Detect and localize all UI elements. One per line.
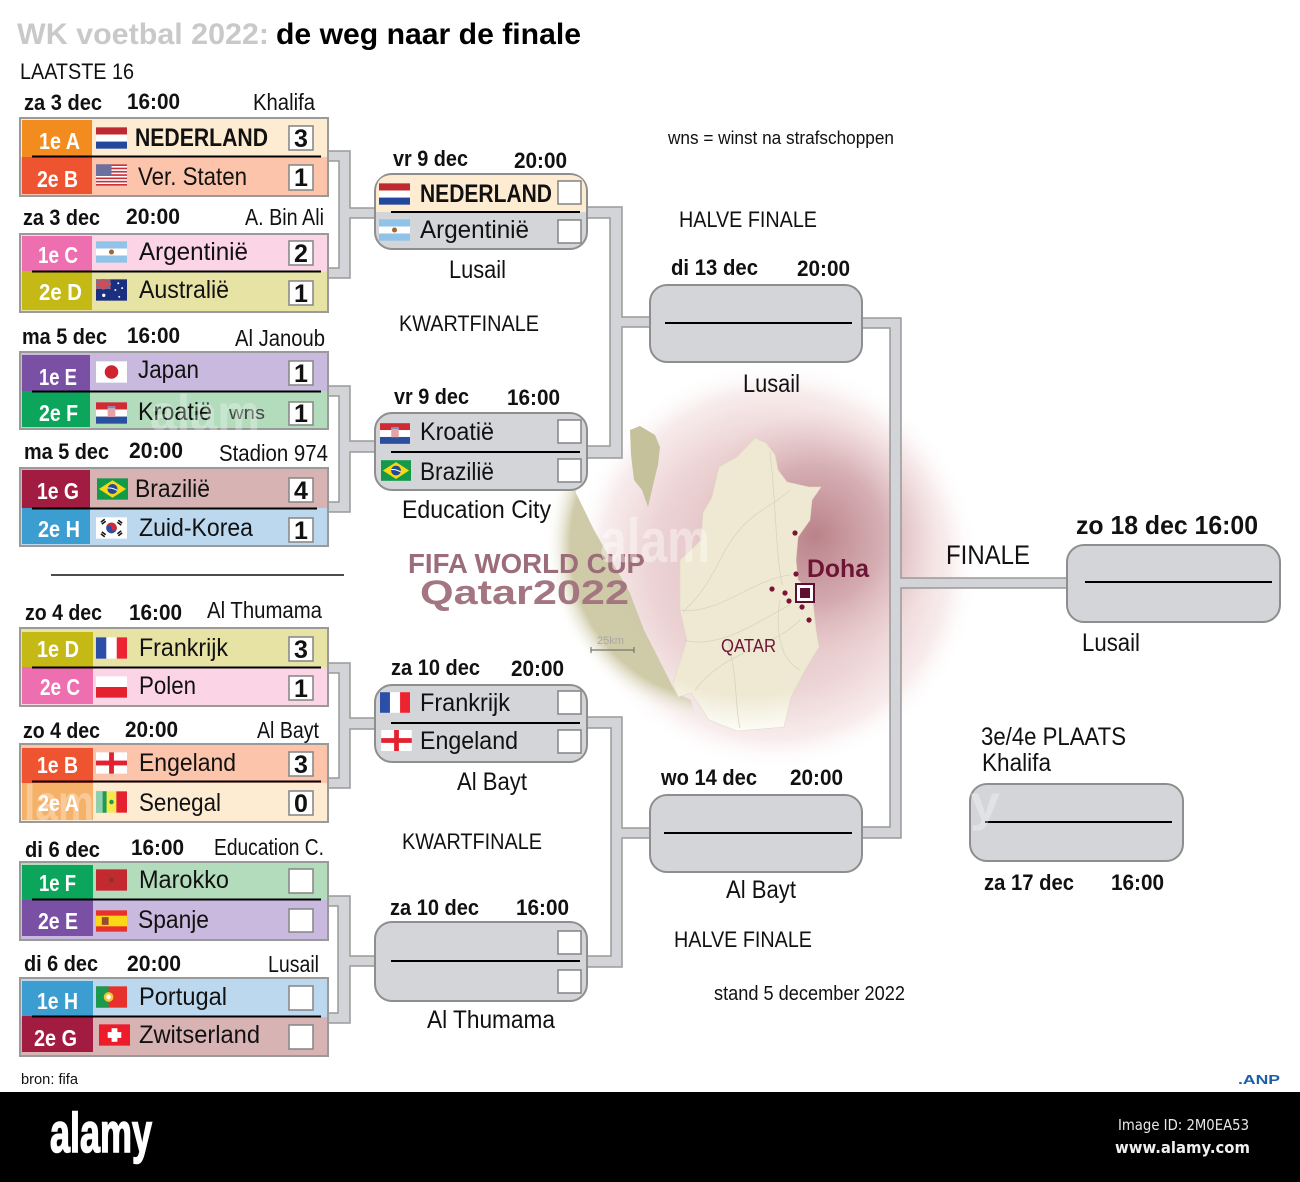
quarter-final: Kroatie - Brazilie: Kroatië [420,418,494,446]
match header: 20:00 [790,765,843,790]
footer site: www.alamy.com [1115,1138,1250,1157]
match: Nederland - Ver. Staten: 1 [294,164,308,192]
match date [984,870,1164,895]
match date: 16:00 [1111,870,1164,895]
match header [660,765,843,790]
heading: third place [981,723,1126,777]
heading: third place: Khalifa [982,749,1051,777]
match header: A. Bin Ali [245,204,324,230]
match: Argentinie - Australie [20,204,328,312]
match header: Lusail [268,951,319,977]
heading: semi final bottom: HALVE FINALE [674,927,812,952]
match header: zo 18 dec 16:00 [1076,510,1258,540]
match: Marokko - Spanje: Spanje [138,906,209,934]
match header: 16:00 [507,385,560,410]
map: mainland coast [545,400,705,745]
match: Japan - Kroatie: 1e E [39,364,77,390]
heading: quarter final bottom: KWARTFINALE [402,829,542,854]
match header: 20:00 [511,656,564,681]
match header [394,384,560,410]
match: Engeland - Senegal: Engeland [139,749,236,777]
match header: za 10 dec [391,655,480,680]
logo: FIFA World Cup Qatar 2022 [408,548,645,612]
match: Engeland - Senegal [20,717,328,822]
footer image id: Image ID: 2M0EA53 [1118,1116,1249,1134]
title: WK voetbal 2022: [17,18,269,51]
heading: quarter final top: KWARTFINALE [399,311,539,336]
match: Brazilie - Zuid-Korea [20,438,328,546]
match header [24,438,328,466]
venue: Al Bayt [457,768,527,796]
match header: ma 5 dec [24,439,109,464]
third place match [970,723,1183,895]
label: Doha: Doha [807,555,870,583]
match header: Stadion 974 [219,440,328,466]
match: Brazilie - Zuid-Korea: 4 [294,477,308,505]
match: Brazilie - Zuid-Korea: 1 [294,517,308,545]
match header: Al Janoub [235,325,325,351]
match: Portugal - Zwitserland: Portugal [139,983,227,1011]
quarter-final: open match [375,895,587,1034]
label: QATAR: QATAR [721,636,776,656]
logo: ANP: .ANP [1238,1072,1280,1087]
match: Frankrijk - Polen: Polen [139,672,196,700]
match: Brazilie - Zuid-Korea: Brazilië [135,475,210,503]
venue: Lusail [743,370,800,398]
quarter-final: Frankrijk - Engeland: Engeland [420,727,518,755]
match: Marokko - Spanje: 2e E [38,908,78,934]
match header [23,204,324,230]
match header: zo 4 dec [23,718,100,743]
watermarks: alam [150,385,260,441]
match: Engeland - Senegal: 1e B [37,752,78,778]
map: Bahrain [630,426,660,507]
match: Engeland - Senegal: 2e A [38,790,79,816]
match: Argentinie - Australie: Australië [139,276,229,304]
footer bar [0,1092,1300,1182]
match: Argentinie - Australie: 1 [294,280,308,308]
quarter-final: Frankrijk - Engeland: Frankrijk [420,689,510,717]
match header [24,89,315,115]
match header [25,834,324,862]
heading: semi final top: HALVE FINALE [679,207,817,232]
match: Japan - Kroatie: wns [228,403,265,423]
match header: za 3 dec [24,90,102,115]
semi-final: bottom [650,765,862,904]
match: Engeland - Senegal: 3 [294,751,308,779]
match: Frankrijk - Polen [20,597,328,706]
match: Engeland - Senegal: Senegal [139,789,221,817]
match header [23,717,320,743]
match: Brazilie - Zuid-Korea: Zuid-Korea [139,514,253,542]
match: Frankrijk - Polen: 3 [294,636,308,664]
match: Marokko - Spanje: Marokko [139,866,229,894]
match: Argentinie - Australie: 1e C [38,242,78,268]
match: Frankrijk - Polen: 1 [294,675,308,703]
match: Frankrijk - Polen: 2e C [40,674,80,700]
title: de weg naar de finale [276,18,581,51]
match: Argentinie - Australie: Argentinië [139,238,248,266]
divider [51,574,344,576]
map scale [591,635,634,653]
match: Japan - Kroatie [20,323,328,429]
match: Nederland - Ver. Staten: 3 [294,125,308,153]
icon: Doha marker [796,584,814,602]
match header: di 6 dec [24,951,98,976]
match header: 20:00 [125,717,178,742]
quarter-final: Nederland - Argentinie: Argentinië [420,216,529,244]
quarter-final: Nederland - Argentinie: NEDERLAND [420,180,552,208]
match header [391,655,564,681]
watermarks: alam [600,507,710,576]
heading: last 16: LAATSTE 16 [20,59,134,84]
match header: Al Bayt [257,717,320,743]
match header: 16:00 [131,835,184,860]
map: city markers [769,530,812,623]
match header [671,255,850,281]
match header [390,895,569,920]
note: wns legend: wns = winst na strafschoppen [667,128,894,148]
match header: za 10 dec [390,895,479,920]
match date: za 17 dec [984,870,1074,895]
note: stand: stand 5 december 2022 [714,983,905,1005]
match header: 20:00 [797,256,850,281]
match header [24,951,319,977]
match: Nederland - Ver. Staten: 2e B [37,166,78,192]
match header: Education C. [214,834,324,860]
quarter-final: Kroatie - Brazilie [375,384,587,524]
watermarks [24,385,1000,831]
source: bron: fifa [21,1071,79,1088]
match: Japan - Kroatie: 1 [294,360,308,388]
final [1067,510,1280,657]
match: Japan - Kroatie: 2e F [39,400,78,426]
match header: Khalifa [253,89,315,115]
match: Argentinie - Australie: 2e D [39,279,82,305]
match header: 16:00 [516,895,569,920]
match: Japan - Kroatie: Japan [138,356,199,384]
match header: 16:00 [127,89,180,114]
venue: Al Bayt [726,876,796,904]
match header: 16:00 [129,600,182,625]
connectors [328,151,1068,1023]
match: Nederland - Ver. Staten: NEDERLAND [135,124,268,152]
match header: vr 9 dec [393,146,468,171]
map: Qatar land [673,438,821,731]
match header: 20:00 [514,148,567,173]
watermarks: y [970,775,1000,831]
match: Nederland - Ver. Staten: 1e A [39,128,80,154]
logo: FIFA World Cup Qatar 2022: FIFA WORLD CUP [408,548,645,579]
match header: ma 5 dec [22,324,107,349]
match: Nederland - Ver. Staten: Ver. Staten [138,163,247,191]
watermarks: lam [24,775,94,831]
match header [25,597,322,625]
match: Japan - Kroatie: 1 [294,400,308,428]
match: Portugal - Zwitserland: 2e G [34,1025,77,1051]
venue: Lusail [1082,629,1140,657]
heading: third place: 3e/4e PLAATS [981,723,1126,751]
match header: Al Thumama [207,597,322,623]
match header: vr 9 dec [394,384,469,409]
venue: Al Thumama [427,1006,555,1034]
match: Brazilie - Zuid-Korea: 2e H [38,516,80,542]
match: Frankrijk - Polen: Frankrijk [139,634,228,662]
quarter-final: Frankrijk - Engeland [375,655,587,796]
match header: 20:00 [129,438,183,463]
title [17,18,581,51]
match header [22,323,325,351]
footer logo: alamy: alamy [50,1101,152,1164]
match: Japan - Kroatie: Kroatië [138,398,212,426]
match: Engeland - Senegal: 0 [294,790,308,818]
match header: zo 4 dec [25,600,102,625]
venue: Education City [402,496,551,524]
match: Marokko - Spanje: 1e F [39,870,76,896]
logo: FIFA World Cup Qatar 2022: Qatar2022 [420,574,629,612]
match: Frankrijk - Polen: 1e D [37,636,79,662]
match: Argentinie - Australie: 2 [294,240,308,268]
match: Portugal - Zwitserland [20,951,328,1056]
match: Portugal - Zwitserland: Zwitserland [139,1021,260,1049]
match header: wo 14 dec [660,765,757,790]
match: Portugal - Zwitserland: 1e H [37,988,78,1014]
match header [393,146,567,173]
match header: 16:00 [127,323,180,348]
match header: di 6 dec [25,837,100,862]
match header: 20:00 [127,951,181,976]
map scale: 25km [597,635,624,647]
match header: za 3 dec [23,205,100,230]
heading: final: FINALE [946,540,1030,570]
match: Brazilie - Zuid-Korea: 1e G [37,478,79,504]
match: Marokko - Spanje [20,834,328,940]
quarter-final: Nederland - Argentinie [375,146,587,284]
map: Qatar [545,360,980,770]
match header: di 13 dec [671,255,758,280]
map: roads [680,452,800,728]
quarter-final: Kroatie - Brazilie: Brazilië [420,458,494,486]
match header: 20:00 [126,204,180,229]
semi-final: top [650,255,862,398]
venue: Lusail [449,256,506,284]
match: Nederland - Ver. Staten [20,89,328,196]
